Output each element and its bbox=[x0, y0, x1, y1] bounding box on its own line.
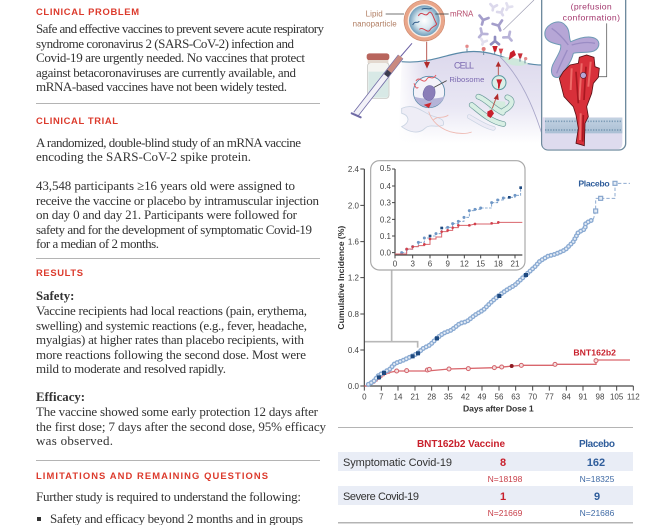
y axis tick labels: 0.4 bbox=[348, 346, 360, 355]
text block: participants: 43,548 participants ≥16 years old were assigned to bbox=[36, 178, 295, 193]
text block: clinical problem: Safe and effective vaccines to prevent severe acute respiratory bbox=[36, 21, 324, 36]
row: symptomatic Covid-19: N=18198 bbox=[488, 474, 523, 484]
x axis tick labels: 42 bbox=[461, 392, 470, 401]
row: symptomatic Covid-19: N=18325 bbox=[580, 474, 615, 484]
x axis tick labels bbox=[362, 392, 640, 401]
inset x tick labels: 0 bbox=[393, 260, 398, 269]
text block: participants: for a median of 2 months. bbox=[36, 236, 159, 251]
green organelle region bbox=[502, 57, 528, 66]
inset x tick labels: 6 bbox=[428, 260, 433, 269]
panel: spike detail bbox=[542, 0, 626, 150]
panel: clinical trial bbox=[36, 115, 320, 251]
inset axes bbox=[395, 169, 522, 255]
inset x tick labels: 18 bbox=[494, 260, 503, 269]
row: symptomatic Covid-19: 162 bbox=[587, 457, 605, 469]
text block: study design: A randomized, double-blind study of an mRNA vaccine bbox=[36, 135, 301, 150]
x axis tick labels: 35 bbox=[444, 392, 453, 401]
y axis tick labels: 1.6 bbox=[348, 238, 360, 247]
surface spike proteins bbox=[465, 45, 527, 63]
x axis title: Days after Dose 1 bbox=[463, 403, 534, 413]
row: severe Covid-19: N=21669 bbox=[488, 508, 523, 518]
inset y tick labels: 0.0 bbox=[380, 248, 392, 257]
x axis tick labels: 49 bbox=[478, 392, 487, 401]
text block: participants: safety and for the development of symptomatic Covid-19 bbox=[36, 222, 312, 237]
inset y tick labels bbox=[380, 164, 392, 257]
inset y tick labels: 0.2 bbox=[380, 215, 392, 224]
x axis tick labels: 21 bbox=[411, 392, 420, 401]
inset x tick labels: 12 bbox=[460, 260, 469, 269]
series: placebo bbox=[368, 181, 630, 384]
panel: results bbox=[36, 267, 326, 448]
label: prefusion conformation: conformation) bbox=[563, 13, 620, 23]
text block: efficacy: was observed. bbox=[36, 433, 113, 448]
lavender base bbox=[542, 117, 622, 149]
text block: safety bbox=[36, 289, 307, 376]
zoom line bbox=[503, 0, 534, 30]
label: BNT162b2: BNT162b2 bbox=[573, 347, 616, 357]
label: cell: CELL bbox=[454, 60, 474, 70]
x axis tick labels: 56 bbox=[495, 392, 504, 401]
label: lipid nanoparticle: Lipid bbox=[366, 10, 383, 19]
vesicle with spike bbox=[487, 61, 506, 118]
row: severe Covid-19: 1 bbox=[500, 491, 506, 503]
row: symptomatic Covid-19: Symptomatic Covid-19 bbox=[343, 457, 452, 469]
label: prefusion conformation bbox=[563, 2, 620, 23]
text block: safety: swelling) and systemic reactions (e.g., fever, headache, bbox=[36, 318, 307, 333]
x axis tick labels: 63 bbox=[511, 392, 521, 401]
x axis tick labels: 84 bbox=[562, 392, 571, 401]
label: Placebo: Placebo bbox=[578, 179, 610, 189]
row: severe Covid-19: N=21686 bbox=[580, 508, 615, 518]
text block: safety: Vaccine recipients had local reactions (pain, erythema, bbox=[36, 303, 307, 318]
series: BNT162b2 bbox=[364, 359, 630, 386]
column header: vaccine: BNT162b2 Vaccine bbox=[417, 439, 505, 450]
text block: efficacy: the first dose; 7 days after the second dose, 95% efficacy bbox=[36, 419, 326, 434]
text block: clinical problem: against betacoronaviruses are currently available, and bbox=[36, 65, 296, 80]
x axis tick labels: 77 bbox=[545, 392, 554, 401]
leader lines to inset bbox=[364, 270, 418, 348]
y axis tick labels bbox=[348, 165, 360, 391]
y axis tick labels: 1.2 bbox=[348, 274, 360, 283]
text block: safety: myalgias) at higher rates than placebo recipients, with bbox=[36, 332, 304, 347]
illustration: mRNA vaccine mechanism bbox=[352, 0, 626, 150]
x axis tick labels: 91 bbox=[579, 392, 588, 401]
text block: participants bbox=[36, 178, 320, 251]
heading: clinical trial: CLINICAL TRIAL bbox=[36, 115, 118, 126]
panel: inset chart bbox=[371, 161, 525, 270]
arrow: into cell bbox=[424, 42, 430, 69]
x axis tick labels: 70 bbox=[528, 392, 538, 401]
text block: participants: on day 0 and day 21. Participants were followed for bbox=[36, 207, 298, 222]
text block: study design: encoding the SARS-CoV-2 spike protein. bbox=[36, 149, 251, 164]
label: ribosome: Ribosome bbox=[449, 75, 484, 84]
label: mRNA bbox=[435, 10, 474, 19]
inset y tick labels: 0.1 bbox=[380, 232, 392, 241]
text block: clinical problem bbox=[36, 21, 324, 94]
ribosome vesicle bbox=[413, 75, 447, 108]
inset series: placebo bbox=[395, 186, 522, 254]
y axis tick labels: 2.4 bbox=[348, 165, 360, 174]
inset x tick labels: 15 bbox=[476, 260, 486, 269]
translated mRNA strand bbox=[429, 112, 472, 133]
lipid nanoparticle bbox=[404, 0, 445, 41]
row: symptomatic Covid-19: 8 bbox=[500, 457, 506, 469]
column header: placebo: Placebo bbox=[579, 439, 615, 450]
panel: limitations bbox=[36, 470, 303, 525]
inset series: BNT162b2 bbox=[395, 221, 522, 254]
inset x tick labels: 9 bbox=[445, 260, 450, 269]
table: case counts bbox=[338, 427, 633, 524]
text block: further study: Further study is required to understand the following: bbox=[36, 489, 301, 504]
golgi bbox=[469, 97, 512, 128]
label: mRNA: mRNA bbox=[450, 10, 474, 19]
x axis tick labels: 112 bbox=[627, 392, 640, 401]
y axis title: Cumulative Incidence (%) bbox=[336, 226, 346, 330]
x axis tick labels: 0 bbox=[362, 392, 367, 401]
cell body bbox=[398, 51, 543, 143]
text block: participants: receive the vaccine or placebo by intramuscular injection bbox=[36, 193, 320, 208]
x axis tick labels: 14 bbox=[394, 392, 403, 401]
label: prefusion conformation: (prefusion bbox=[571, 2, 612, 12]
inset x tick labels: 21 bbox=[511, 260, 520, 269]
panel: clinical problem bbox=[36, 6, 324, 94]
x axis tick labels: 28 bbox=[427, 392, 437, 401]
text block: study design bbox=[36, 135, 301, 164]
text block: efficacy: The vaccine showed some early protection 12 days after bbox=[36, 404, 319, 419]
inset y tick labels: 0.3 bbox=[380, 199, 392, 208]
antibodies outside cell bbox=[476, 3, 515, 46]
text block: efficacy: Efficacy: bbox=[36, 390, 85, 404]
spike protein bbox=[559, 55, 599, 146]
heading: results: RESULTS bbox=[36, 267, 83, 278]
heading: limitations and remaining questions: LIMITATIONS AND REMAINING QUESTIONS bbox=[36, 470, 268, 481]
row: symptomatic Covid-19 bbox=[343, 457, 615, 484]
antibody bbox=[545, 22, 599, 77]
text block: clinical problem: mRNA-based vaccines have not been widely tested. bbox=[36, 79, 287, 94]
lipid membrane bbox=[545, 118, 622, 133]
label: lipid nanoparticle bbox=[353, 10, 404, 29]
inset y tick labels: 0.4 bbox=[380, 182, 392, 191]
x axis tick labels: 105 bbox=[610, 392, 624, 401]
text block: safety: mild to moderate and resolved rapidly. bbox=[36, 361, 226, 376]
label: lipid nanoparticle: nanoparticle bbox=[353, 20, 397, 29]
row backgrounds bbox=[338, 452, 633, 471]
x axis tick labels: 98 bbox=[596, 392, 605, 401]
axes bbox=[364, 169, 633, 386]
text block: clinical problem: syndrome coronavirus 2 (SARS-CoV-2) infection and bbox=[36, 36, 294, 51]
text block: safety: more reactions following the second dose. Most were bbox=[36, 347, 306, 362]
y axis tick labels: 0.8 bbox=[348, 310, 360, 319]
row: severe Covid-19: Severe Covid-19 bbox=[343, 491, 419, 503]
endoplasmic reticulum bbox=[402, 107, 444, 132]
text block: efficacy bbox=[36, 390, 326, 448]
row: severe Covid-19: 9 bbox=[594, 491, 600, 503]
cell membrane bbox=[402, 51, 543, 65]
text block: safety: Safety: bbox=[36, 289, 74, 303]
y axis tick labels: 2.0 bbox=[348, 201, 360, 210]
inset y tick labels: 0.5 bbox=[380, 164, 392, 173]
row: severe Covid-19 bbox=[343, 491, 615, 518]
heading: clinical problem: CLINICAL PROBLEM bbox=[36, 6, 139, 17]
inset x tick labels: 3 bbox=[410, 260, 415, 269]
syringe bbox=[352, 43, 412, 117]
inset x tick labels bbox=[393, 260, 520, 269]
x axis tick labels: 7 bbox=[379, 392, 384, 401]
y axis tick labels: 0.0 bbox=[348, 382, 360, 391]
line chart: cumulative incidence bbox=[336, 161, 640, 413]
vial bbox=[367, 53, 389, 98]
text block: clinical problem: Covid-19 are urgently needed. No vaccines that protect bbox=[36, 50, 305, 65]
